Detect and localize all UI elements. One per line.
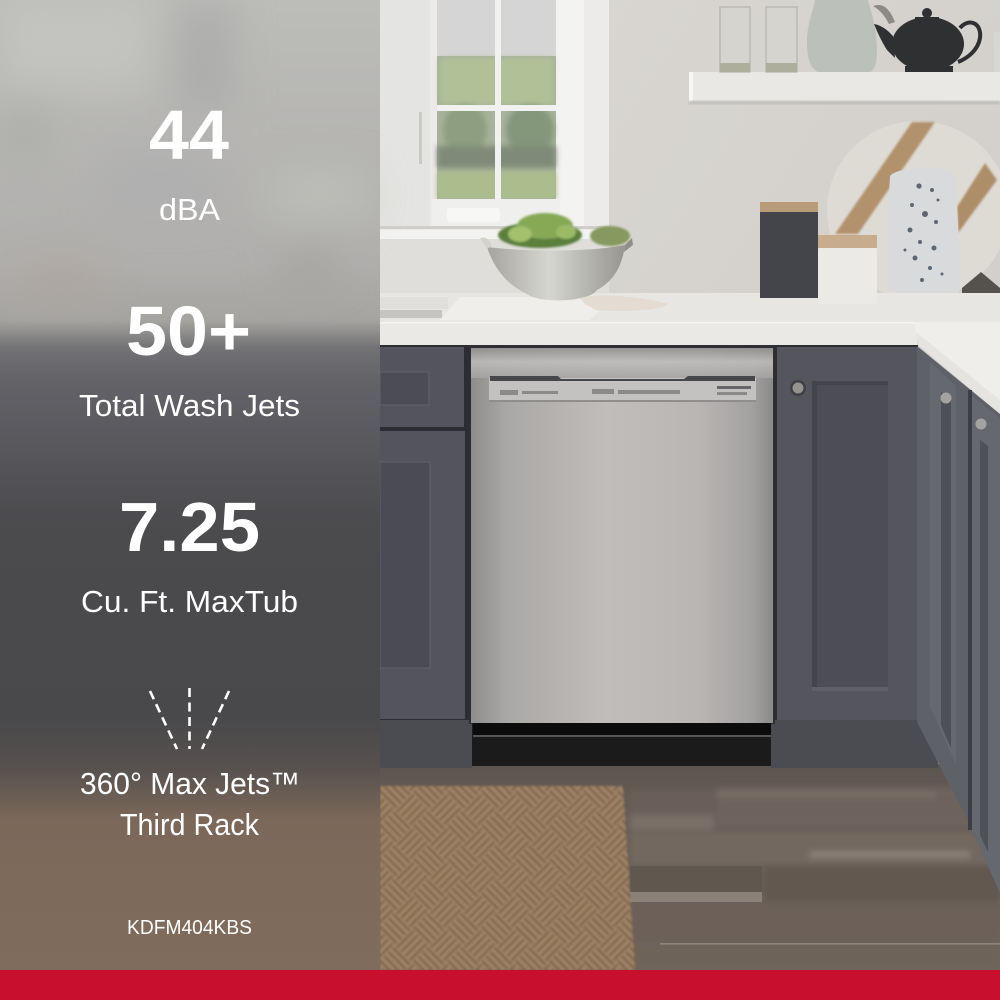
- stat: 44 dBA: 44: [149, 96, 229, 174]
- towel: [440, 297, 600, 320]
- red footer bar: [0, 970, 1000, 1000]
- stat: 50+ total wash jets: [79, 292, 300, 423]
- stat: 50+ total wash jets: 50+: [126, 292, 251, 370]
- rug: [380, 786, 635, 970]
- dark jar: [760, 202, 818, 298]
- kitchen photo background: [380, 0, 1000, 970]
- stat: 44 dBA: dBA: [159, 192, 220, 227]
- floor: [380, 764, 1000, 970]
- dishwasher: [469, 345, 775, 766]
- vase: [807, 0, 877, 72]
- lower cabinets: [380, 345, 938, 768]
- countertop: [380, 293, 1000, 414]
- window: [380, 0, 609, 239]
- feature: third rack: [80, 766, 300, 842]
- teapot: [873, 5, 980, 72]
- stat: 7.25 cu ft maxtub: [81, 488, 298, 619]
- feature: third rack: 360° Max Jets™: [80, 766, 300, 801]
- sink edge: [380, 297, 448, 318]
- glasses: [720, 7, 797, 72]
- stat: 44 dBA: [149, 96, 229, 227]
- icon: spray jets: [150, 688, 229, 749]
- control strip: [489, 376, 756, 402]
- stat: 50+ total wash jets: Total Wash Jets: [79, 388, 300, 423]
- stat: 7.25 cu ft maxtub: Cu. Ft. MaxTub: [81, 584, 298, 619]
- white jar: [818, 235, 877, 304]
- shelf: [689, 72, 1000, 104]
- bowl with greens: [480, 213, 668, 311]
- toe kick: [472, 723, 771, 766]
- stat: 7.25 cu ft maxtub: 7.25: [119, 488, 260, 566]
- model number: KDFM404KBS: [127, 917, 252, 939]
- left info panel: [0, 0, 380, 970]
- side cabinets: [917, 346, 1000, 893]
- feature: third rack: Third Rack: [120, 807, 259, 842]
- cutting board: [827, 121, 1000, 299]
